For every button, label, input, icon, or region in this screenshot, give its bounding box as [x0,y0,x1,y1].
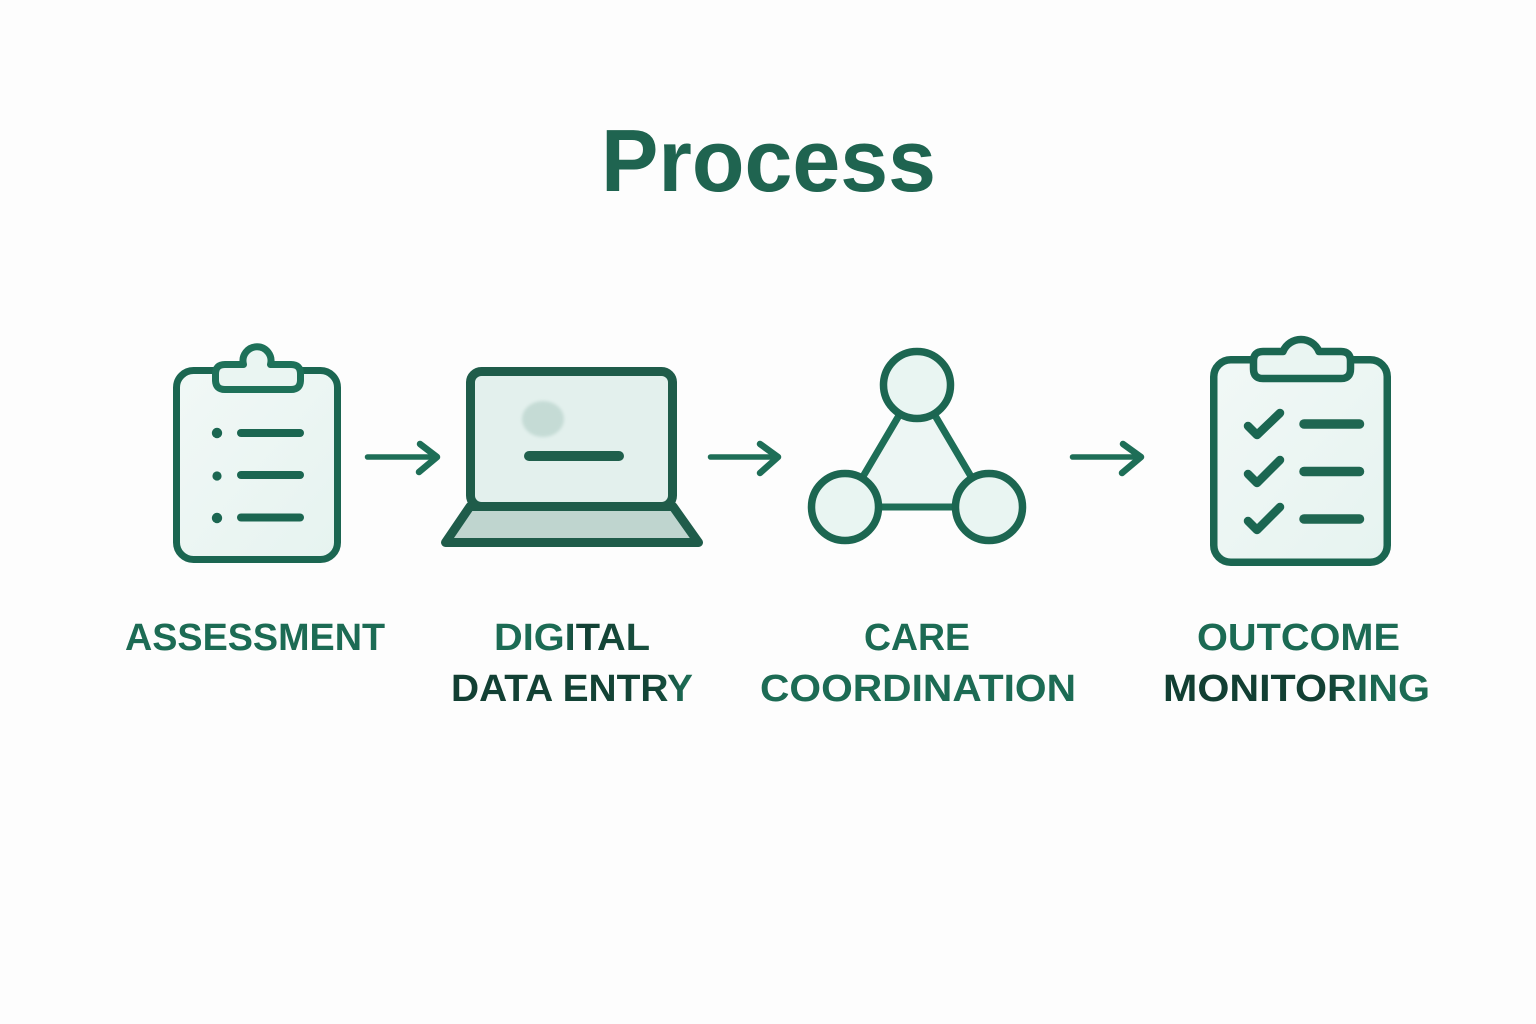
label: care coordination [760,617,1076,710]
step 3: care coordination network icon [812,352,1022,540]
screen text line [529,451,619,461]
label: outcome monitoring: OUTCOME [1197,617,1400,659]
step 1: assessment clipboard icon [176,347,338,560]
label: digital data entry: DATA ENTRY [451,668,693,710]
laptop base [446,506,698,542]
arrow: data entry to care coordination [710,444,778,473]
step 4: outcome monitoring checklist clipboard icon [1214,340,1387,562]
left node [812,474,878,540]
label: care coordination: COORDINATION [760,668,1076,710]
top node [884,352,950,418]
laptop screen [470,372,672,506]
connecting triangle [845,385,989,507]
arrow: assessment to data entry [368,444,437,472]
blurred avatar mark [522,401,564,437]
step 2: digital data entry laptop icon [446,372,698,542]
label: outcome monitoring: MONITORING [1163,668,1430,710]
check item lines [1304,424,1360,519]
label: assessment: ASSESSMENT [125,617,385,659]
clipboard body [176,370,338,560]
arrow: care coordination to outcome monitoring [1072,444,1141,473]
label: digital data entry [451,617,693,710]
label: outcome monitoring [1163,617,1430,710]
label: care coordination: CARE [864,617,970,659]
right node [956,474,1022,540]
checklist bullets [212,428,222,523]
clipboard body [1214,360,1387,562]
check marks [1248,413,1280,530]
clipboard clip [216,347,300,390]
checklist lines [241,433,300,518]
clipboard clip [1254,340,1350,378]
title: Process [601,111,936,210]
label: digital data entry: DIGITAL [494,617,650,659]
